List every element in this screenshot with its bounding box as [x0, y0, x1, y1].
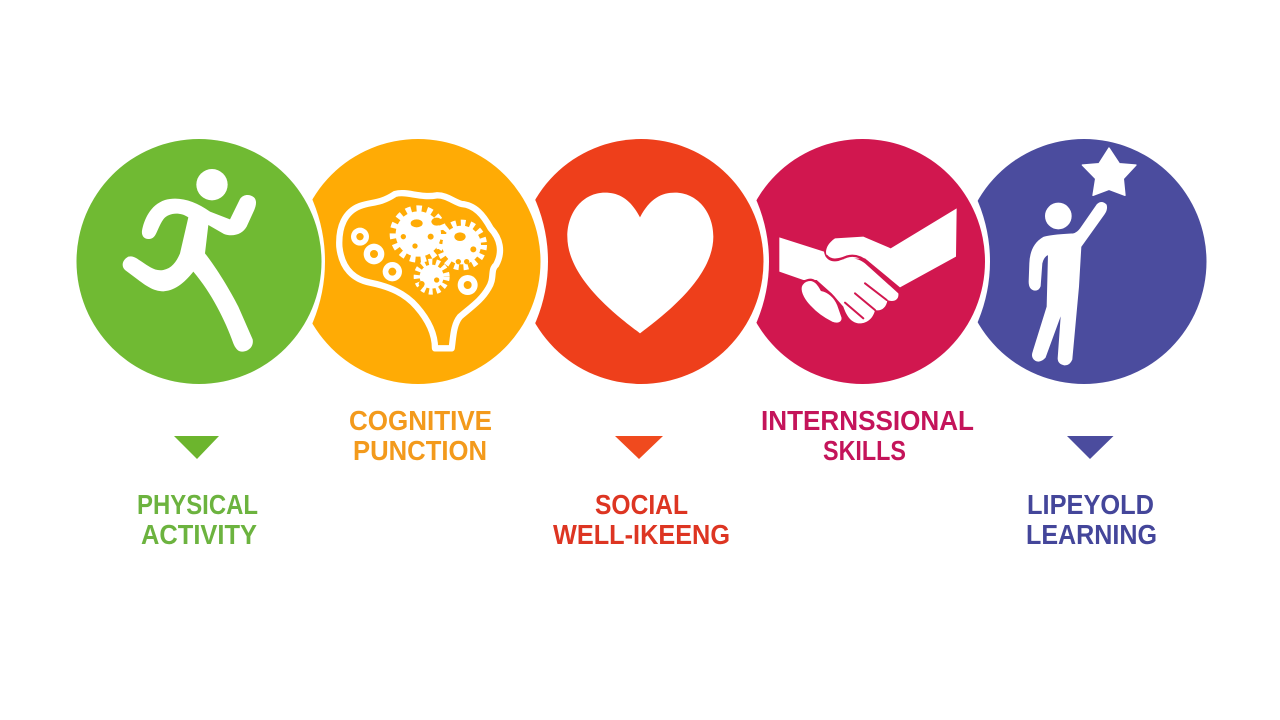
circle: orange: [296, 139, 540, 384]
label: physical activity: ACTIVITY: [141, 519, 257, 550]
label: interpersonal skills: INTERNSSIONAL: [761, 405, 974, 436]
circle: red: [518, 139, 764, 384]
panel: cognitive function: [238, 106, 548, 466]
label: social well-being: [553, 489, 730, 550]
icon: handshake: [779, 208, 957, 324]
circle: crimson: [740, 139, 985, 384]
icon: person reaching for star: [1029, 148, 1136, 365]
label: interpersonal skills: [761, 405, 974, 466]
label: social well-being: SOCIAL: [595, 489, 688, 520]
label: interpersonal skills: SKILLS: [823, 435, 906, 466]
arrow: green triangle: [174, 436, 219, 459]
icon: brain with gears: [339, 193, 500, 348]
label: lifelong learning: LEARNING: [1026, 519, 1157, 550]
label: physical activity: PHYSICAL: [137, 489, 258, 520]
label: social well-being: WELL-IKEENG: [553, 519, 730, 550]
arrow: purple triangle: [1067, 436, 1114, 459]
label: physical activity: [137, 489, 258, 550]
icon: heart: [567, 193, 713, 333]
label: lifelong learning: LIPEYOLD: [1027, 489, 1154, 520]
panel: lifelong learning: [962, 139, 1206, 550]
circle: green: [76, 139, 322, 384]
arrow: red triangle: [615, 436, 663, 459]
label: cognitive function: COGNITIVE: [349, 405, 492, 436]
panel: interpersonal skills: [680, 106, 990, 466]
panel: social well-being: [459, 106, 769, 550]
panel: physical activity: [9, 104, 325, 550]
label: lifelong learning: [1026, 489, 1157, 550]
icon: running figure: [123, 169, 256, 352]
circle: purple: [962, 139, 1206, 384]
label: cognitive function: PUNCTION: [353, 435, 487, 466]
label: cognitive function: [349, 405, 492, 466]
